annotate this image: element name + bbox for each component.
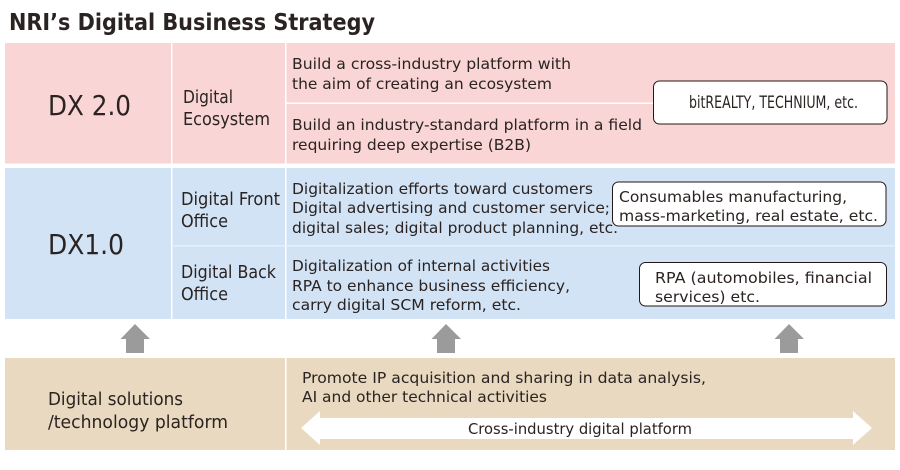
callout: RPA: RPA (automobiles, financial <box>655 269 872 287</box>
text: front office efforts: Digital advertising and customer service; <box>292 199 610 217</box>
heading: DX1.0: DX1.0 <box>48 228 124 261</box>
text: IP acquisition: AI and other technical activities <box>302 388 547 406</box>
callout: consumables <box>612 182 886 226</box>
arrow: cross-industry platform <box>301 411 872 445</box>
label: Digital Ecosystem: Digital <box>183 88 233 108</box>
callout: RPA: services) etc. <box>655 288 760 306</box>
label: Digital Front Office: Office <box>181 212 228 232</box>
callout: bitREALTY <box>654 81 887 124</box>
text: back office efforts <box>292 257 570 314</box>
text: industry-standard platform: Build an industry-standard platform in a field <box>292 116 642 134</box>
arrow: cross-industry platform: Cross-industry digital platform <box>468 420 692 438</box>
text: front office efforts <box>292 180 618 237</box>
label: Digital Back Office: Office <box>181 285 228 305</box>
heading: DX 2.0: DX 2.0 <box>48 89 131 122</box>
label: Digital Back Office <box>181 263 277 305</box>
heading: digital solutions: Digital solutions <box>48 390 183 410</box>
arrow: up left <box>120 324 150 353</box>
panel: DX 2.0 <box>5 43 895 164</box>
text: front office efforts: Digitalization efforts toward customers <box>292 180 593 198</box>
text: back office efforts: RPA to enhance business efficiency, <box>292 277 570 295</box>
text: cross-industry platform <box>292 55 571 93</box>
label: Digital Ecosystem: Ecosystem <box>183 110 270 130</box>
text: IP acquisition: Promote IP acquisition and sharing in data analysis, <box>302 369 706 387</box>
label: Digital Front Office <box>181 190 280 232</box>
panel: digital solutions <box>5 358 895 450</box>
heading: digital solutions: /technology platform <box>48 413 228 433</box>
text: front office efforts: digital sales; digital product planning, etc. <box>292 219 618 237</box>
text: cross-industry platform: the aim of creating an ecosystem <box>292 75 552 93</box>
label: Digital Ecosystem <box>183 88 270 130</box>
label: Digital Back Office: Digital Back <box>181 263 277 283</box>
title: NRI’s Digital Business Strategy <box>9 10 375 36</box>
panel: DX 1.0 <box>5 168 895 319</box>
arrow: up centre <box>432 324 461 353</box>
callout: RPA <box>640 262 886 306</box>
text: industry-standard platform: requiring deep expertise (B2B) <box>292 136 531 154</box>
arrow: up right <box>774 324 804 353</box>
heading: digital solutions <box>48 390 228 433</box>
text: industry-standard platform <box>292 116 642 154</box>
text: back office efforts: carry digital SCM reform, etc. <box>292 296 521 314</box>
callout: consumables: Consumables manufacturing, <box>619 188 847 206</box>
text: IP acquisition <box>302 369 706 406</box>
callout: consumables: mass-marketing, real estate, etc. <box>619 207 878 225</box>
text: cross-industry platform: Build a cross-industry platform with <box>292 55 571 73</box>
label: Digital Front Office: Digital Front <box>181 190 280 210</box>
text: back office efforts: Digitalization of internal activities <box>292 257 550 275</box>
